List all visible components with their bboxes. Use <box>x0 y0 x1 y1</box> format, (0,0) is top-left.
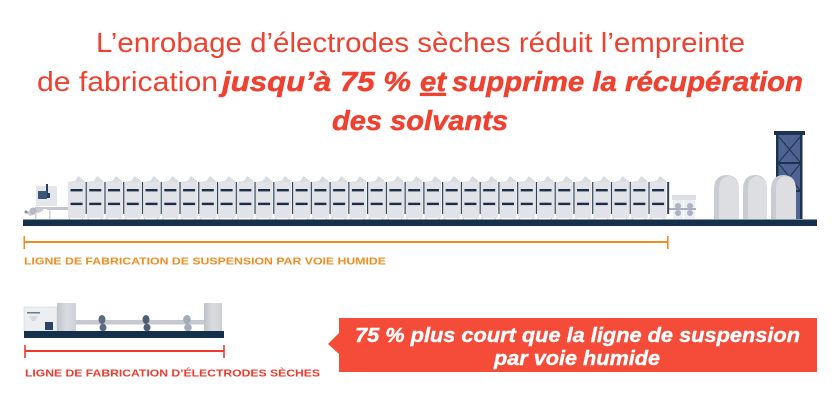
wet line label: LIGNE DE FABRICATION DE SUSPENSION PAR VOIE HUMIDE <box>24 256 386 268</box>
callout: par voie humide <box>493 348 660 370</box>
dry line length bar <box>24 345 225 358</box>
icon: right tank <box>204 303 222 331</box>
callout: 75 % plus court que la ligne de suspension <box>355 325 800 347</box>
icon: roller pairs <box>98 315 192 331</box>
title: L’enrobage d’électrodes sèches réduit l’empreinte <box>96 27 745 58</box>
icon: coater head <box>24 184 68 219</box>
dry line machinery <box>24 303 224 338</box>
icon: feeder box <box>24 307 57 331</box>
title: supprime la récupération <box>452 66 803 97</box>
title: de fabrication <box>37 66 218 97</box>
wet line length bar <box>24 236 669 249</box>
title: jusqu’à 75 % <box>218 66 411 97</box>
wet line base <box>23 220 817 226</box>
dry line base <box>24 331 224 338</box>
title: et <box>420 66 448 97</box>
title <box>37 27 803 136</box>
icon: left tank <box>57 303 76 331</box>
icon: pipe <box>76 320 204 324</box>
drying modules <box>68 176 669 220</box>
icon: silos <box>714 175 796 219</box>
dry line label: LIGNE DE FABRICATION D’ÉLECTRODES SÈCHES <box>25 366 320 380</box>
callout <box>328 318 817 372</box>
icon: end rollers machine <box>669 195 696 219</box>
icon: tower <box>774 131 805 219</box>
wet line machinery <box>23 131 817 226</box>
title: des solvants <box>332 105 508 136</box>
